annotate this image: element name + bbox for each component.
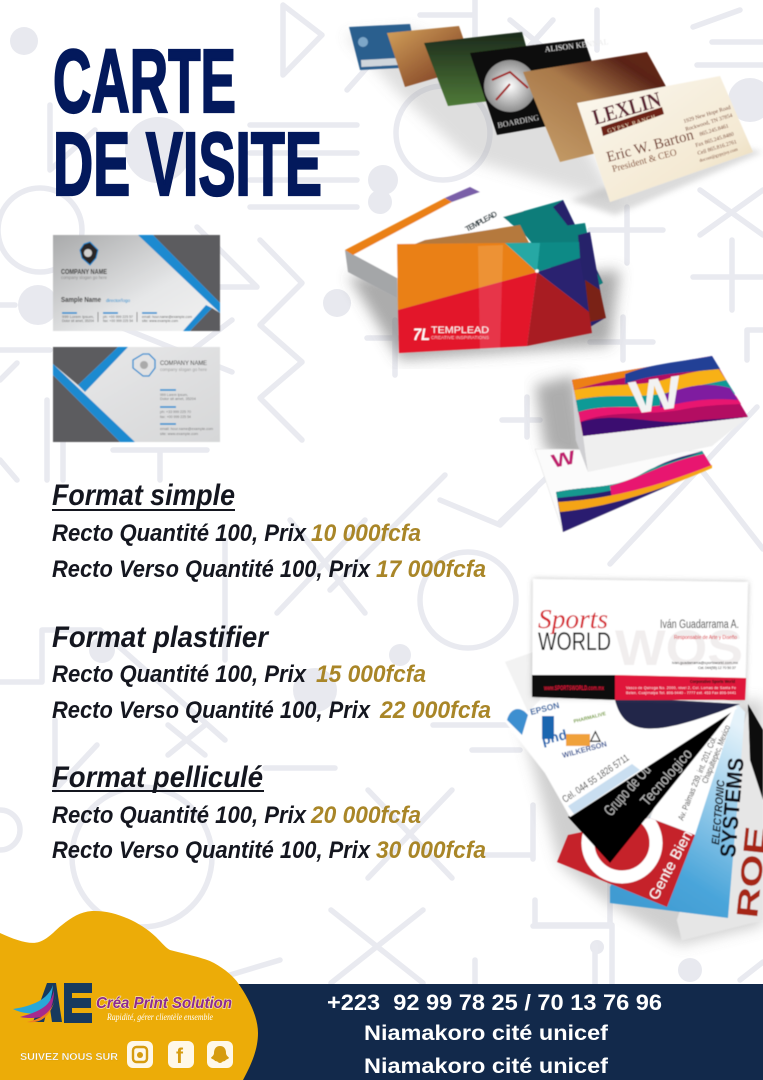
photo: Sports World card fan: Iván Guadarrama A. [660, 619, 739, 631]
business card sample: verso: COMPANY NAME [160, 360, 207, 367]
business card sample: verso: email: hour.name@example.com [160, 427, 213, 431]
section: format plastifier: Recto Quantité 100, Prix [52, 661, 308, 688]
photo: fan of business cards, top: President & CEO [611, 148, 678, 175]
photo: fan of business cards, top: LEXLIN [589, 86, 664, 130]
business card sample: verso: ph: +33 999 225 70 [160, 410, 191, 414]
photo: Templead business cards: TEMPLEAD [464, 209, 499, 234]
business card sample: recto: ph: +00 999 225 57 [103, 315, 133, 319]
heading: format pelliculé: Format pelliculé [52, 761, 263, 794]
photo: Sports World card fan: phd [540, 726, 569, 748]
business card sample: recto: fax: +00 999 225 54 [103, 319, 133, 323]
title: DE VISITE [53, 115, 322, 215]
photo: Sports World card fan: Corporativo Sports World [690, 679, 735, 684]
footer contact text: Niamakoro cité unicef [364, 1021, 609, 1045]
photo: fan of business cards, top: docont@gypyjoy.com [699, 146, 739, 163]
business card sample: recto: 999 Lorem Ipsum, [62, 315, 94, 319]
icon: instagram [127, 1041, 153, 1068]
heading: format plastifier: Format plastifier [52, 621, 270, 654]
section: format pelliculé [52, 761, 486, 864]
photo: Templead business cards: TEMPLEAD [431, 325, 489, 336]
section: format pelliculé: Recto Quantité 100, Prix [52, 802, 308, 829]
photo: colourful wave W cards: W [550, 447, 578, 473]
photo: Templead business cards: JOHN SMITH [398, 240, 436, 264]
business card sample: recto: company slogan go here [61, 275, 107, 280]
photo: fan of business cards, top: 1929 New Hope Road [683, 105, 732, 125]
business card sample: recto [53, 235, 220, 331]
photo: Sports World card fan: Vasco de Quiroga No. 2000, nivel 2, Col. Lomas de Santa Fe [626, 686, 736, 690]
section: format simple: Recto Verso Quantité 100, Prix [52, 556, 372, 583]
photo: Sports World card fan: PHARMALIVE [573, 711, 607, 725]
photo: Templead business cards: CREATIVE INSPIRATIONS [431, 335, 489, 340]
photo: Sports World card fan: Cel. 044(55) 12 70 50 37 [698, 666, 736, 670]
logo [13, 983, 232, 1023]
footer contact text: +223 92 99 78 25 / 70 13 76 96 [327, 990, 662, 1015]
photo: Sports World card fan: Chapultepec, Mexico [700, 723, 732, 785]
business card sample: recto: director/logo [106, 298, 130, 303]
footer contact text: Niamakoro cité unicef [364, 1054, 609, 1078]
footer contact text [327, 990, 662, 1078]
follow text: SUIVEZ NOUS SUR [20, 1051, 118, 1063]
business card sample: verso: Dolor sit amet, 35204 [160, 397, 196, 401]
photo: colourful wave W cards [535, 356, 748, 532]
social follow row [20, 1041, 233, 1068]
business card sample: verso [53, 347, 220, 442]
photo: fan of business cards, top: Fax 865.245.8480 [695, 131, 735, 149]
business card sample: verso: company slogan go here [160, 367, 207, 372]
business card sample: verso: fax: +00 999 225 54 [160, 415, 191, 419]
photo: colourful wave W cards: W [626, 365, 686, 424]
icon: facebook: f [176, 1045, 184, 1068]
section: format plastifier [52, 621, 491, 724]
tagline: Rapidité, gérer clientèle ensemble [106, 1012, 213, 1022]
section: format pelliculé: 30 000fcfa [376, 837, 486, 864]
photo: fan of business cards, top: Cell 865.816.2761 [697, 139, 738, 157]
heading: format simple: Format simple [52, 479, 235, 512]
footer band [200, 984, 763, 1080]
photo: Sports World card fan: WILKERSON [561, 739, 608, 760]
section: format simple: 10 000fcfa [311, 520, 421, 547]
photo: Sports World card fan: Responsable de Arte y Diseño [674, 635, 737, 641]
photo: Sports World card fan: Sports [538, 604, 608, 634]
photo: Sports World card fan: Cel. 044 55 1826 5711 [561, 753, 632, 805]
photo: Sports World card fan: Belen, Cuajimalpa Tel. 806-9440 - 7777 ext. 453 Fax 806-9441 [626, 691, 736, 695]
photo: Sports World card fan: ivan.guadarrama@sportsworld.com.mx [672, 661, 738, 665]
photo: Sports World card fan: WOS [615, 620, 743, 676]
section: format pelliculé: Recto Verso Quantité 100, Prix [52, 837, 372, 864]
section: format plastifier: 15 000fcfa [316, 661, 426, 688]
photo: fan of business cards, top: GYPSY RANCH [607, 114, 657, 135]
icon: snapchat [207, 1041, 233, 1068]
photo: fan of business cards, top: ALISON KENNAL [544, 37, 609, 54]
photo: Templead business cards: 7L [413, 325, 430, 344]
photo: Sports World card fan: SYSTEMS [715, 757, 749, 858]
photo: Templead business cards [345, 187, 620, 360]
brand name: Créa Print Solution [96, 995, 232, 1012]
yellow blob [0, 911, 258, 1080]
photo: Sports World card fan: Grupo de Ou [601, 762, 655, 820]
photo: Sports World card fan: WORLD [538, 628, 611, 656]
photo: Sports World card fan: Gente Bien [646, 828, 696, 903]
photo: Sports World card fan: Av. Palmas 239, int. 201, Col. [676, 735, 719, 822]
photo: Sports World card fan: www.SPORTSWORLD.com.mx [543, 686, 604, 692]
title [53, 32, 322, 215]
icon: facebook [168, 1041, 194, 1068]
photo: Sports World card fan [503, 579, 763, 945]
section: format plastifier: 22 000fcfa [379, 697, 491, 724]
section: format simple: Recto Quantité 100, Prix [52, 520, 308, 547]
photo: Sports World card fan: EPSON [529, 700, 560, 717]
business card sample: recto: site: www.example.com [142, 319, 178, 323]
section: format simple: 17 000fcfa [376, 556, 486, 583]
business card sample: recto: COMPANY NAME [61, 269, 107, 276]
business card sample: verso: 999 Lorem Ipsum, [160, 393, 188, 397]
business card sample: verso: site: www.example.com [160, 432, 198, 436]
photo: fan of business cards, top: Rockwood, TN 37854 [685, 113, 734, 133]
photo: Sports World card fan: △ [589, 727, 602, 743]
section: format pelliculé: 20 000fcfa [310, 802, 421, 829]
title: CARTE [53, 32, 236, 132]
business card sample: recto: Dolor sit amet, 35204 [62, 319, 94, 323]
photo: fan of business cards, top [345, 24, 763, 215]
photo: fan of business cards, top: 865.245.8461 [699, 123, 730, 138]
photo: Sports World card fan: Tecnologico [637, 746, 696, 810]
business card sample: recto: Sample Name [61, 295, 101, 304]
photo: fan of business cards, top: BOARDING [497, 113, 540, 130]
section: format simple [52, 479, 486, 583]
photo: Sports World card fan: ELECTRONIC [710, 779, 728, 845]
business card sample: recto: email: hour.name@example.com [142, 315, 192, 319]
section: format plastifier: Recto Verso Quantité 100, Prix [52, 697, 372, 724]
photo: fan of business cards, top: Eric W. Barton [605, 127, 696, 166]
logo mark [13, 983, 92, 1023]
